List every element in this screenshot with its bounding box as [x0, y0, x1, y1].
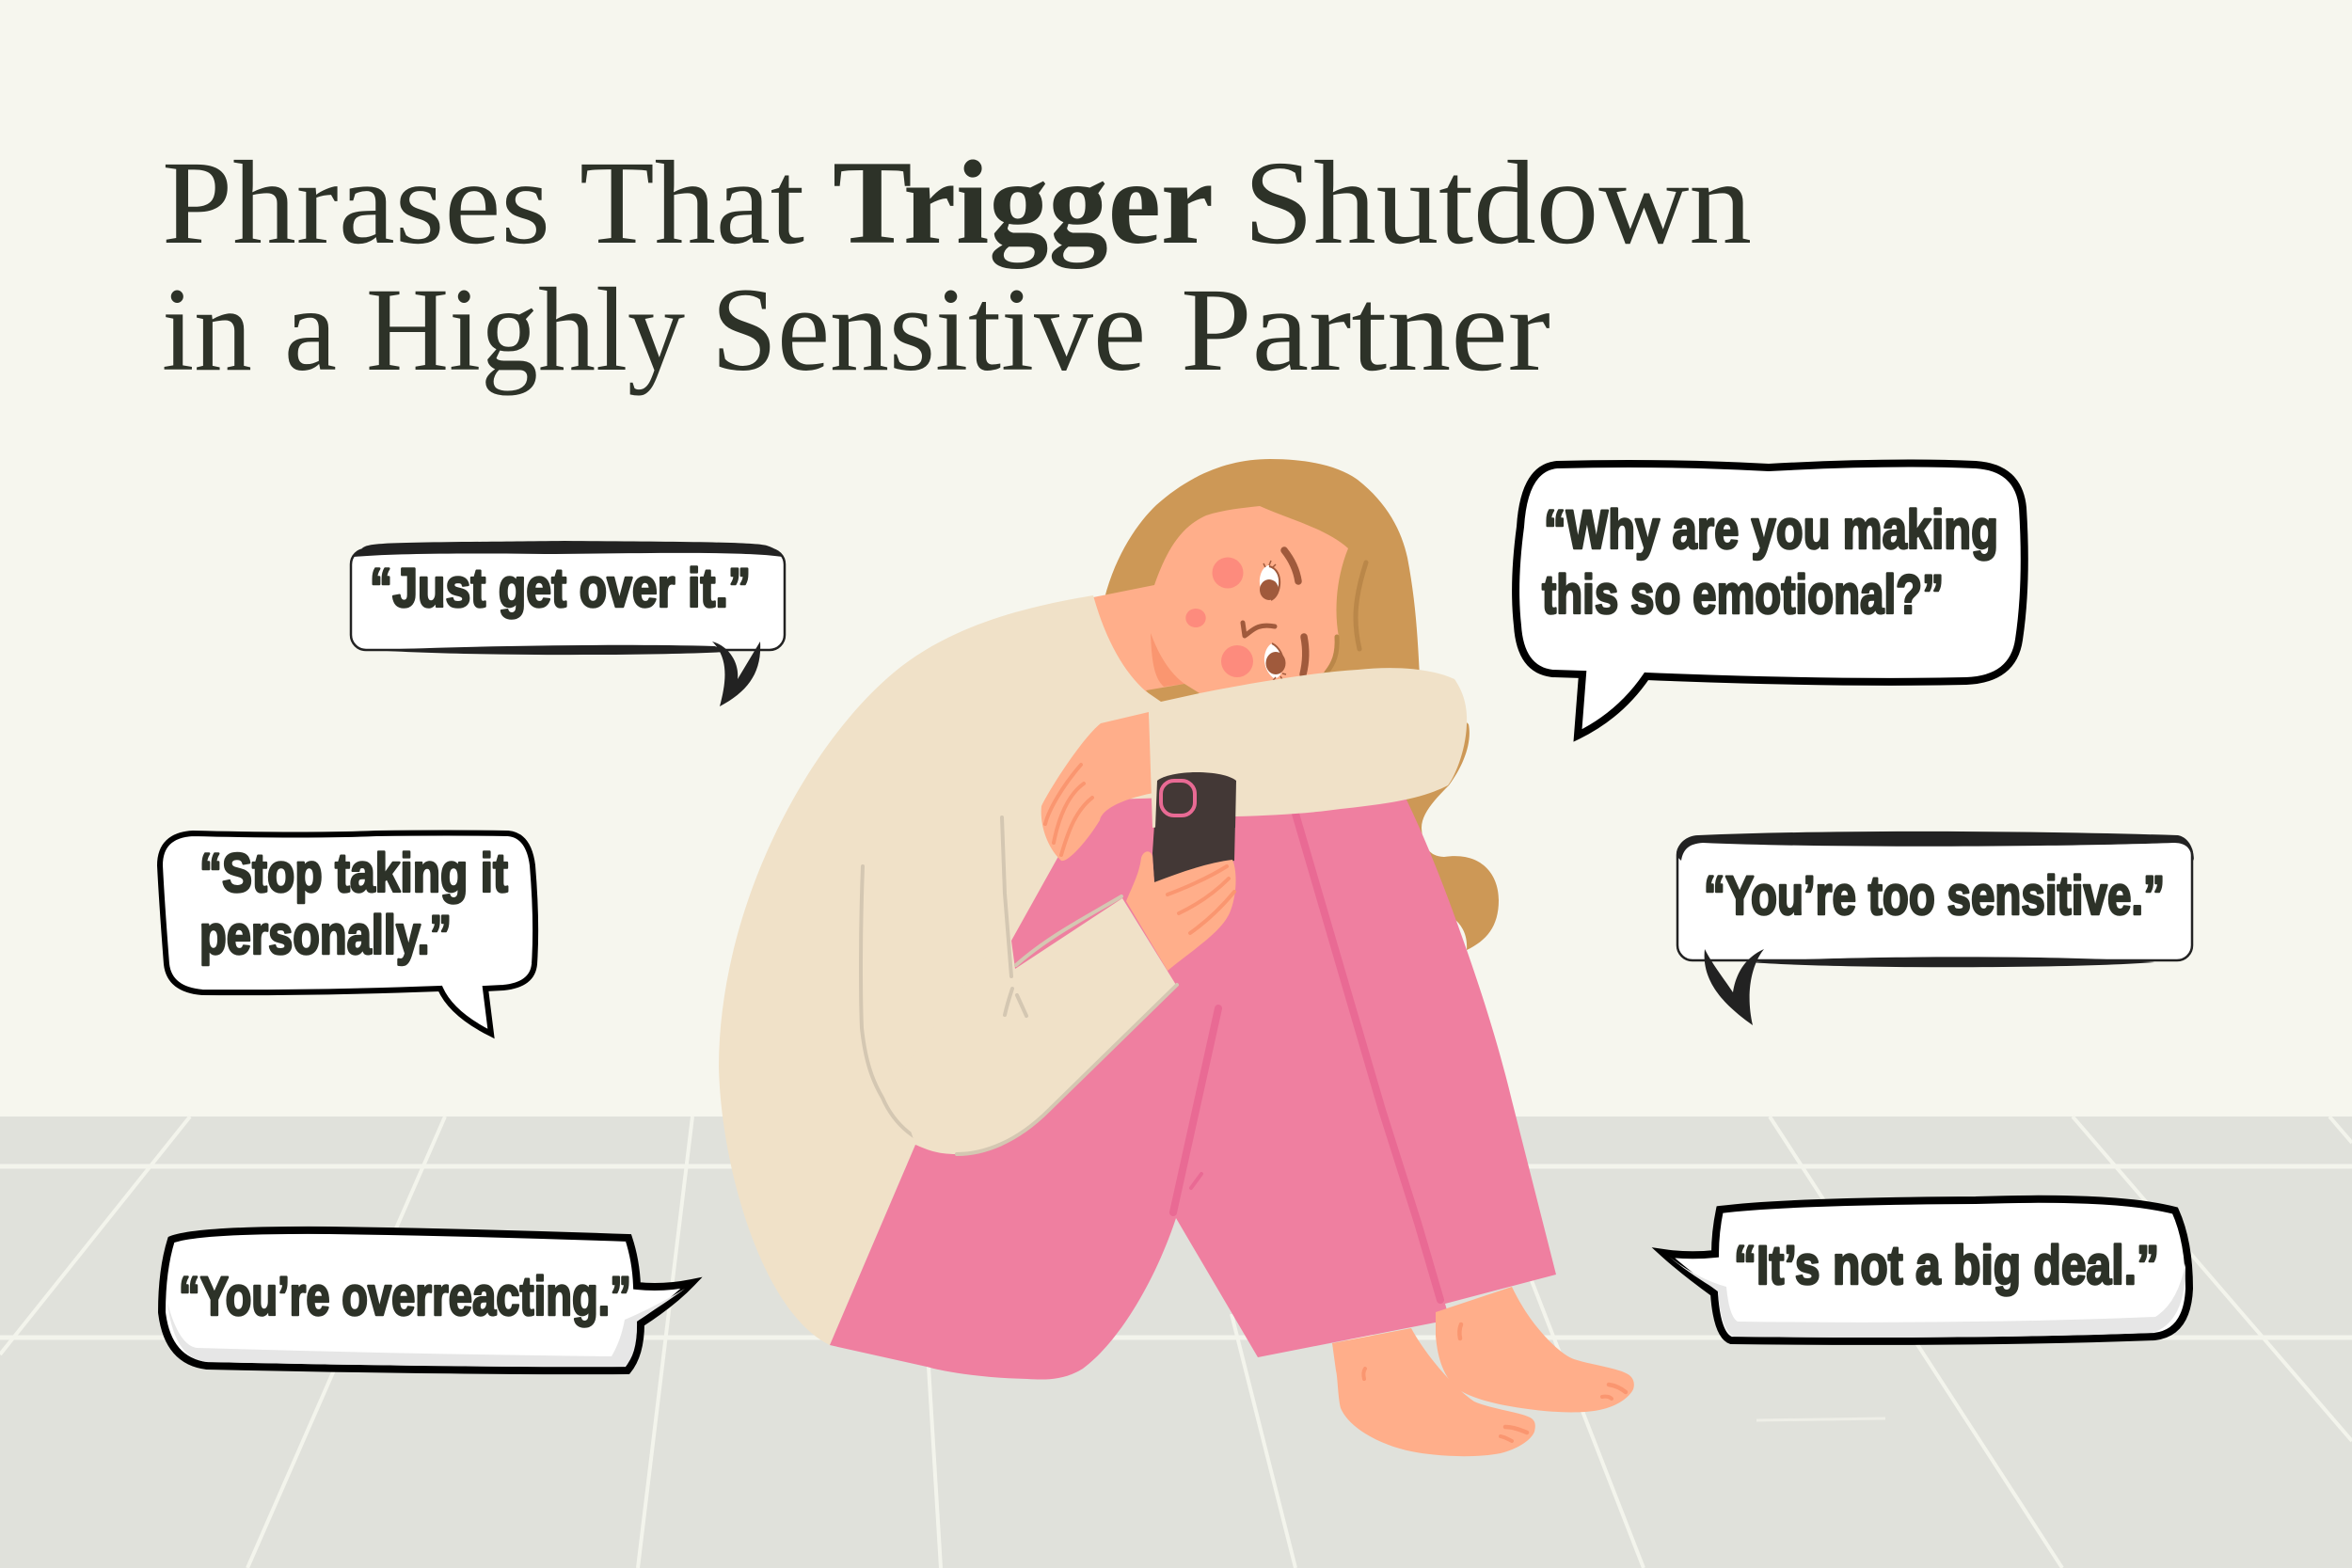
bubble: Why are you making this so emotional: this so emotional?” [1542, 564, 1944, 626]
phone [1152, 772, 1236, 882]
hair under chin and hair strands [1146, 562, 1366, 707]
title: Sensitive [711, 264, 1146, 396]
bubble: Stop taking it personally [160, 833, 535, 1034]
title [162, 137, 1752, 396]
lower sleeve [894, 817, 1177, 1154]
forearm hand on knee [1041, 712, 1153, 861]
title: in [162, 264, 252, 396]
jacket body [719, 595, 1167, 1345]
bubble: You're too sensitive [1677, 832, 2194, 1025]
hair [1104, 459, 1499, 950]
jaw shadow [1151, 633, 1184, 687]
bubble: Stop taking it personally: personally.” [199, 905, 452, 966]
bubble: It's not a big deal: “It’s not a big deal.” [1734, 1235, 2159, 1296]
phone top over sleeve [1155, 772, 1236, 828]
floor tiles [0, 1117, 2352, 1568]
bubble: Just get over it [351, 541, 785, 706]
pink trousers [830, 790, 1556, 1380]
bubble: You're overreacting: “You’re overreacting.” [179, 1266, 631, 1327]
bubble: You're overreacting [162, 1230, 691, 1370]
eyes [1260, 561, 1286, 682]
eyebrows [1284, 550, 1306, 674]
upper arm sleeve [1149, 668, 1467, 828]
title: Phrases [162, 137, 550, 269]
title: Shutdown [1244, 137, 1752, 269]
feet [1332, 1287, 1634, 1456]
bubble: Stop taking it personally: “Stop taking it [199, 843, 508, 904]
blush [1185, 557, 1253, 677]
title: Trigger [833, 137, 1214, 269]
title: a [284, 264, 337, 396]
nose [1243, 623, 1275, 636]
title: That [580, 137, 804, 269]
bubble: Just get over it: “Just get over it.” [370, 558, 751, 619]
face [1093, 506, 1348, 705]
bubble: It's not a big deal [1663, 1199, 2189, 1341]
jacket seam [861, 866, 957, 1154]
hand holding phone [1126, 851, 1236, 971]
trouser fold lines [1173, 814, 1440, 1300]
bubble: Why are you making this so emotional [1516, 464, 2025, 736]
title: Partner [1181, 264, 1550, 396]
illustration: woman hugging knees holding a phone [719, 459, 1634, 1456]
bubble: You're too sensitive: “You’re too sensitive.” [1704, 865, 2165, 927]
title: Highly [366, 264, 685, 396]
bubble: Why are you making this so emotional: “Why are you making [1544, 499, 1998, 561]
